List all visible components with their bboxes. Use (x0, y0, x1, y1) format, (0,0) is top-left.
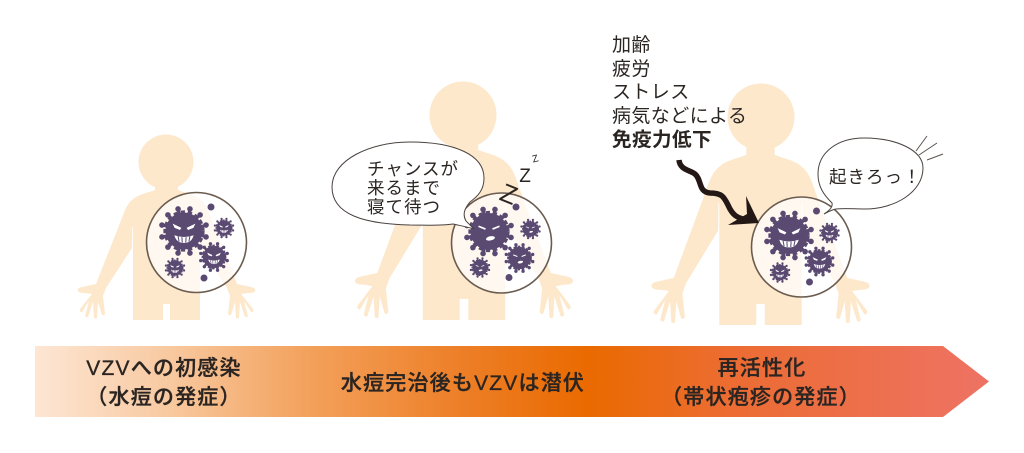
stage 3 label: 再活性化 (718, 357, 806, 380)
sleep marks: Z Z Z (496, 153, 540, 211)
stage 1 label: VZVへの初感染 (86, 356, 242, 380)
wavy arrow (679, 160, 759, 225)
stage 1 label (86, 356, 242, 409)
emphasis lines (916, 136, 943, 160)
list of triggers: ストレス (612, 82, 690, 103)
stage 2 label: 水痘完治後もVZVは潜伏 (341, 372, 585, 395)
list of triggers: 免疫力低下 (612, 128, 712, 151)
speech bubble: waiting (332, 142, 484, 229)
stage 1 label: （水痘の発症） (86, 386, 242, 409)
list of triggers (612, 34, 747, 151)
speech bubble: waiting: チャンスが (367, 159, 459, 179)
list of triggers: 病気などによる (612, 105, 747, 127)
speech bubble: waiting: 来るまで (367, 178, 441, 198)
sleep marks: Z Z Z: Z (519, 166, 531, 187)
speech bubble: wake up: 起きろっ！ (829, 167, 922, 187)
stage 3 label: （帯状疱疹の発症） (661, 386, 861, 409)
magnifier 1: virus circle (146, 192, 246, 292)
person 2: silhouette (355, 82, 573, 320)
timeline arrow (35, 346, 989, 417)
sleep marks: Z Z Z: Z (496, 177, 522, 211)
magnifier 3: reactivated virus circle (752, 197, 852, 297)
list of triggers: 疲労 (612, 58, 651, 80)
sleep marks: Z Z Z: Z (531, 153, 540, 166)
speech bubble: wake up (818, 138, 923, 214)
person 1: silhouette (78, 134, 255, 320)
list of triggers: 加齢 (612, 34, 651, 56)
speech bubble: waiting: 寝て待つ (367, 197, 441, 217)
person 3: silhouette (651, 84, 870, 325)
magnifier 2: sleeping virus circle (452, 193, 552, 293)
stage 3 label (661, 357, 861, 409)
